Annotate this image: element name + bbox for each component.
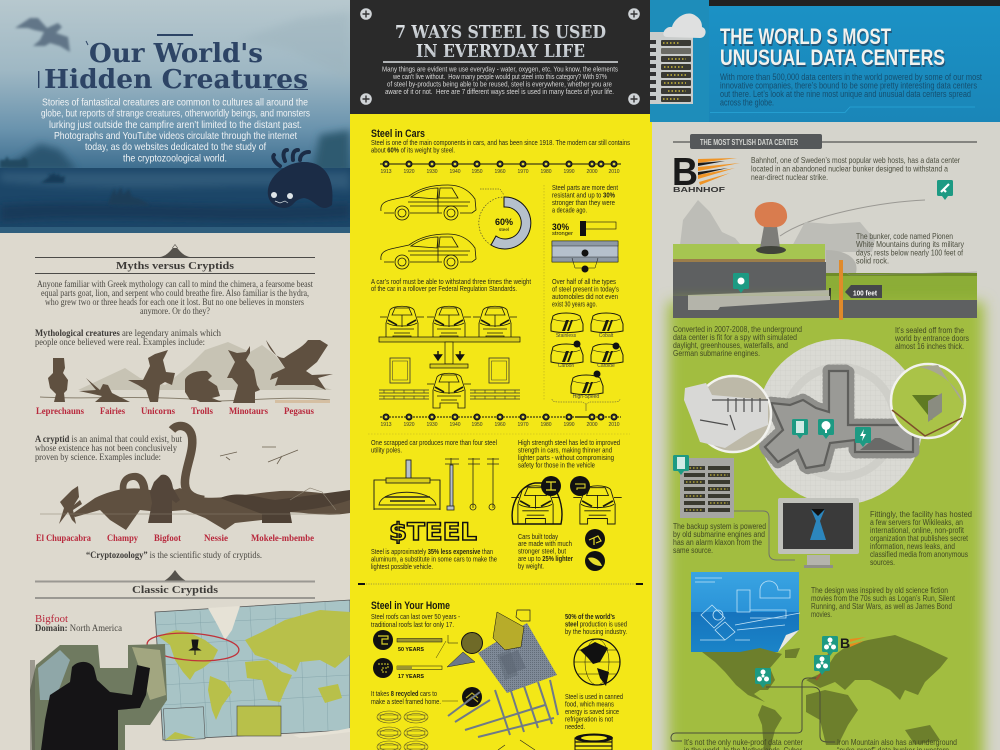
labels: mythological creatures [36,407,314,417]
timeline one: 1913 [380,169,392,175]
blue header [650,0,1000,122]
timeline two: 1920 [403,422,415,428]
depth label [845,285,882,298]
text: dent resistant: resistant and up to 30% [552,190,615,200]
missile trail [780,200,925,236]
text: wikileaks [870,509,972,567]
chart: roof lifespans: 50 YEARS [398,647,424,653]
depth label: 100 feet [853,288,877,298]
text: converted: data center is fit for a spy with simulated [673,332,797,342]
timeline two: 1913 [380,422,392,428]
heading: most stylish data center: THE MOST STYLISH DATA CENTER [700,138,798,147]
text: high strength: High strength steel has led to improved [518,438,620,447]
text: dent resistant [552,183,618,214]
text: recycled cars: It takes 8 recycled cars to [371,689,437,698]
text: scrapped car: One scrapped car produces more than four steel [371,438,497,447]
hero scene [0,0,350,233]
title: Hidden Creatures [44,65,308,95]
icon: floor plan markers [792,419,871,447]
text: canned food: refrigeration is not [565,714,613,724]
timeline two: 2000 [586,422,598,428]
text: converted [673,324,802,358]
text: dent resistant: stronger than they were [552,198,615,207]
text: cryptid definition: A cryptid is an animal that could exist, but [35,435,182,445]
title [720,24,946,72]
timeline two: 1980 [540,422,552,428]
text: roof strength: A car’s roof must be able to withstand three times the weight [371,277,531,286]
logo: small bahnhof: B [840,635,850,651]
chart: roof lifespans [373,630,458,680]
text: steel roofs: traditional roofs last for only 17. [371,620,454,629]
text: bigfoot heading: Bigfoot [35,614,68,625]
icon: lake creature medium [108,187,150,206]
panel: hidden creatures [0,0,350,750]
text: types of steel: Over half of all the types [552,277,616,286]
text: backup system: same source. [673,545,713,555]
text: design inspiration [811,585,955,619]
text: wikileaks: classified media from anonymous [870,549,968,559]
text: less expensive: Steel is approximately 35% less expensive than [371,547,493,556]
icon: radiation marker sweden [822,636,838,656]
title: IN EVERYDAY LIFE [416,41,585,62]
text: myths intro [37,279,313,317]
timeline one: 1960 [494,169,506,175]
labels: mythological creatures: Pegasus [284,407,314,417]
text: canned food [565,692,623,731]
mythological silhouettes [48,340,333,403]
chart: roof lifespans: 17 YEARS [398,674,424,680]
title: UNUSUAL DATA CENTERS [721,47,946,72]
text: canned food: needed. [565,722,585,731]
icon: door circle [891,364,965,438]
text: bunker: White Mountains during its military [856,239,965,249]
labels: cryptids [36,534,314,544]
logo: bahnhof: B [672,151,698,194]
timeline two: 1930 [426,422,438,428]
text: steel in cars [371,138,630,154]
icon: rack marker [673,455,689,475]
icon: radiation marker america [755,668,771,688]
labels: mythological creatures: Leprechauns [36,407,84,417]
icon: bigfoot silhouette [148,475,180,523]
text: backup system: by old submarine engines and [673,529,765,539]
icons: steel types: High-Speed [573,394,599,400]
text: backup system: has an alarm klaxon from the [673,537,762,547]
mountains [78,342,332,390]
text: bigfoot heading: Domain: North America [35,624,123,634]
heading: classic cryptids [35,582,315,598]
text: myths intro: equal parts goat, lion, and serpent who could breathe fire. Also familiar is the hydra, [41,288,309,299]
text: recycled cars: make a steel framed home. [371,697,441,706]
text: intro [382,64,618,96]
title: 7 WAYS STEEL IS USED [395,22,606,43]
text: intro: of steel by-products being able to be reused, steel is everywhere, whether you are [387,80,612,88]
heading: myths versus cryptids [35,258,315,274]
icons: steel types: Carbon [558,363,574,369]
text: intro: across the globe. [720,98,774,108]
intro text: Photographs and YouTube videos circulate through the internet [54,130,297,142]
icon: flying dragon silhouette [15,18,70,52]
text: intro: aware of it or not. Here are 7 different ways steel is used in many facets of your life. [385,87,614,96]
text: wikileaks: sources. [870,557,895,567]
icon: radiation marker netherlands [814,655,830,675]
text: design inspiration: movies. [811,609,832,619]
intro text [41,96,310,164]
text: bunker [856,231,965,266]
icon: server rack and cloud [650,14,706,104]
panel: steel [350,0,652,750]
icon: minotaur [227,346,260,403]
labels: mythological creatures: Unicorns [141,407,175,417]
text: high strength: lighter parts - without compromising [518,453,614,462]
timeline two: 1960 [494,422,506,428]
timeline one: 1940 [449,169,461,175]
text: cars built today: are made with much [518,539,572,548]
icon: can [575,734,613,750]
text: intro: Many things are evident we use everyday - water, oxygen, etc. You know, the elements [382,64,618,74]
text: wikileaks: Fittingly, the facility has hosted [870,509,972,519]
text: less expensive [371,547,497,571]
icons: steel types: Carbide [597,363,615,369]
labels: cryptids: Mokele-mbembe [251,534,314,544]
icon: el chupacabra [59,486,82,524]
text: cars built today: Cars built today [518,532,558,541]
heading: classic cryptids: Classic Cryptids [132,585,218,596]
icons: steel types: Stainless [556,333,577,339]
text: dent resistant: a decade ago. [552,206,587,214]
timeline two [380,414,621,428]
icon: server rack [680,458,734,518]
icons: recycled cars [377,711,428,750]
panel: data centers [650,0,1000,750]
logo: small bahnhof [840,635,866,651]
text: cars built today: by weight. [518,562,544,570]
world map [155,600,350,741]
text: bahnhof intro: located in an abandoned nuclear bunker designed to withstand a [751,164,948,174]
timeline one: 1920 [403,169,415,175]
text: myths intro: who grew two or three heads for each one it lost. But no one believes in monsters [45,297,304,308]
text: cyberbunker [684,737,803,750]
logo: bahnhof [672,151,740,194]
text: bunker: days, rests below nearly 100 feet of [856,248,963,258]
heading: steel in cars: Steel in Cars [371,128,425,140]
stat: 30 percent stronger: 30% [552,222,569,233]
icons: strong cars [511,476,622,524]
icons: utility poles [445,458,499,510]
icon: lake creature small [41,172,65,183]
intro text: the cryptozoological world. [123,152,227,164]
icon: ornament [160,244,190,257]
paper background [0,233,350,750]
text: cars built today: are up to 25% lighter [518,554,573,563]
text: canned food: Steel is used in canned [565,692,623,701]
icons: screws [360,8,640,105]
text: steel in cars: Steel is one of the main components in cars, and has been since 1918. The modern car still contains [371,138,630,147]
timeline one: 1990 [563,169,575,175]
text: wikileaks: organization that publishes secret [870,533,968,543]
world map [702,635,948,750]
intro text: Stories of fantastical creatures are common to cultures all around the [42,96,308,108]
labels: mythological creatures: Trolls [191,407,213,417]
intro text: today, as do websites dedicated to the study of [85,141,266,153]
labels: cryptids: Bigfoot [154,534,182,544]
title [395,22,606,62]
text: cryptozoology: “Cryptozoology” is the scientific study of cryptids. [86,550,262,561]
icon: map marker circle [146,630,240,664]
text: myths intro: Anyone familiar with Greek mythology can call to mind the chimera, a fearsome beast [37,279,313,290]
cryptid silhouettes [40,426,350,530]
text: design inspiration: movies from the 70s such as Logan’s Run, Silent [811,593,955,603]
intro text: lurking just outside the campfire aren’t limited to the distant past. [49,119,302,131]
icon: exploded house [436,610,558,750]
icon: pegasus [266,340,333,390]
text: mythological creatures: Mythological creatures are legendary animals which [35,329,221,339]
callout lines [671,678,835,742]
text: converted: Converted in 2007-2008, the underground [673,324,802,334]
text: bahnhof intro [751,155,960,182]
text: design inspiration: Running, and Star Wars, as well as James Bond [811,601,952,611]
labels: mythological creatures: Minotaurs [229,407,268,417]
text: cars built today: stronger steel, but [518,546,566,556]
icon: steel logo: $TEEL [389,518,477,546]
icon: engine circle [684,376,771,452]
text: intro: we can’t live without. How many people would put steel into this category? With 97% [392,72,607,81]
timeline one: 1930 [426,169,438,175]
text: types of steel: exist 30 years ago. [552,300,597,308]
icon: nessie neck [172,426,204,500]
stat: 30 percent stronger: stronger [552,231,573,237]
icon: missile marker [937,180,953,200]
yellow background [350,114,652,750]
paper background [652,0,1000,750]
bigfoot photo [30,644,167,750]
text: mythological creatures: people once believed were real. Examples include: [35,338,205,348]
chart: 60 percent donut: 60% [495,217,513,227]
intro text: globe, but reports of strange creatures, otherworldly beings, and monsters [41,108,310,120]
icon: troll [185,371,222,402]
timeline two: 1940 [449,422,461,428]
text: canned food: energy is saved since [565,707,619,716]
icons: steel types [551,313,623,411]
icon: car side bottom [381,234,476,269]
heading: myths versus cryptids: Myths versus Cryptids [116,261,234,272]
icons: down arrows [434,351,464,360]
rocks [680,200,875,260]
timeline two: 1950 [471,422,483,428]
icon: mokele mbembe [220,490,350,523]
icons: birds [220,447,298,464]
icon: dent diagram [552,221,618,272]
text: types of steel: automobiles did not even [552,292,618,301]
ground cross-section [673,244,977,318]
text: types of steel [552,277,619,308]
text: steel in cars: about 60% of its weight by steel. [371,146,455,154]
labels: cryptids: Champy [107,534,138,544]
depth ruler [839,260,843,320]
text: backup system: The backup system is powered [673,521,766,531]
timeline two: 2010 [608,422,620,428]
green panel [668,302,984,750]
text: less expensive: lightest possible vehicle. [371,562,433,571]
text: sealed off: world by entrance doors [894,333,969,343]
text: roof strength [371,277,531,293]
text: bunker: The bunker, code named Pionen [856,231,953,241]
logo: bahnhof: BAHNHOF [673,187,726,194]
icon: car crusher [374,460,440,510]
heading: most stylish data center [673,134,977,149]
icon: mushroom cloud [755,202,787,254]
text: iron mountain: Iron Mountain also has an underground [837,737,957,747]
text: mythological creatures [35,329,221,348]
icon: car side top [381,185,476,220]
text: roof strength: of the car in a rollover per Federal Regulation Standards. [371,284,517,293]
text: wikileaks: a few servers for Wikileaks, an [870,517,963,527]
text: steel roofs: Steel roofs can last over 50 years - [371,612,460,621]
stat: 30 percent stronger [552,222,573,237]
text: cars built today [518,532,573,570]
text: canned food: food, which means [565,700,614,708]
icon: sun marker [733,273,749,293]
icons: steel types: Cobalt [599,333,614,339]
text: intro [720,72,982,108]
text: sealed off: almost 16 inches thick. [895,341,964,351]
text: housing industry: 50% of the world’s [565,612,615,621]
icon: globe [574,639,620,686]
timeline two: 1990 [563,422,575,428]
title: THE WORLD S MOST [720,24,891,49]
chart: 60 percent donut [479,189,531,249]
text: high strength [518,438,620,470]
title: Our World's [89,39,263,69]
icon: leprechaun [48,358,68,402]
text: backup system [673,521,766,555]
text: recycled cars [371,689,441,706]
chart: floor plan circle [757,339,923,505]
icon: wikileaks monitor [778,498,859,568]
timeline two: 1970 [517,422,529,428]
labels: cryptids: El Chupacabra [36,534,91,544]
text: cryptid definition: whose existence has not been conclusively [35,444,177,454]
text: dent resistant: Steel parts are more dent [552,183,618,192]
timeline one: 1970 [517,169,529,175]
text: housing industry: steel production is used [565,620,627,628]
text: myths intro: anymore. Or do they? [140,307,210,317]
timeline one [380,161,621,175]
text: housing industry [565,612,627,636]
icon: dark blob monster [268,150,333,208]
rule [383,61,618,63]
icons: three cars on platform [379,306,520,368]
text: high strength: strength in cars, making thinner and [518,446,612,454]
divider [358,583,643,585]
text: bigfoot heading [35,614,123,634]
text: design inspiration: The design was inspired by old science fiction [811,585,948,595]
text: iron mountain [837,737,957,750]
text: wikileaks: information, news leaks, and [870,541,955,551]
icon: blueprint [691,572,800,652]
text: scrapped car [371,438,497,454]
text: converted: daylight, greenhouses, waterfalls, and [673,340,788,350]
title [38,34,308,95]
text: housing industry: by the housing industry. [565,627,627,636]
text: cryptid definition: proven by science. Examples include: [35,453,161,463]
icon: ornament [160,570,190,582]
title: THE WORLD S MOST [721,26,892,51]
icon: fairy [79,378,130,402]
text: bahnhof intro: near-direct nuclear strike. [751,172,828,182]
title: UNUSUAL DATA CENTERS [720,45,945,70]
text: wikileaks: international, online, non-profit [870,525,964,535]
icon: bigfoot [41,662,150,750]
chart: 60 percent donut: steel [499,227,509,233]
header band [350,0,651,114]
icons: crushed car and walls [379,358,520,408]
text: scrapped car: utility poles. [371,446,402,454]
text: bunker: solid rock. [856,256,889,266]
text: sealed off: It’s sealed off from the [895,325,964,335]
text: cryptid definition [35,435,182,463]
text: converted: German submarine engines. [673,348,760,358]
text: less expensive: aluminum, a substitute in some cars to make the [371,554,497,564]
ground line [40,397,330,401]
timeline one: 1950 [471,169,483,175]
labels: mythological creatures: Fairies [100,407,125,417]
timeline one: 2000 [586,169,598,175]
top bar [709,0,1000,6]
timeline one: 2010 [608,169,620,175]
text: sealed off [894,325,969,351]
text: steel roofs [371,612,460,629]
heading: steel in your home: Steel in Your Home [371,600,450,612]
icon: unicorn [128,350,175,402]
icon: nessie body [72,488,350,530]
icon: champy loop [120,473,149,500]
cable [734,511,795,560]
labels: cryptids: Nessie [204,534,228,544]
icons: black circles [585,529,605,571]
text: high strength: safety for those in the vehicle [518,460,595,470]
timeline one: 1980 [540,169,552,175]
text: types of steel: of steel present in today’s [552,284,619,294]
divider [543,185,545,400]
text: cyberbunker: It’s not the only nuke-proof data center [684,737,803,747]
